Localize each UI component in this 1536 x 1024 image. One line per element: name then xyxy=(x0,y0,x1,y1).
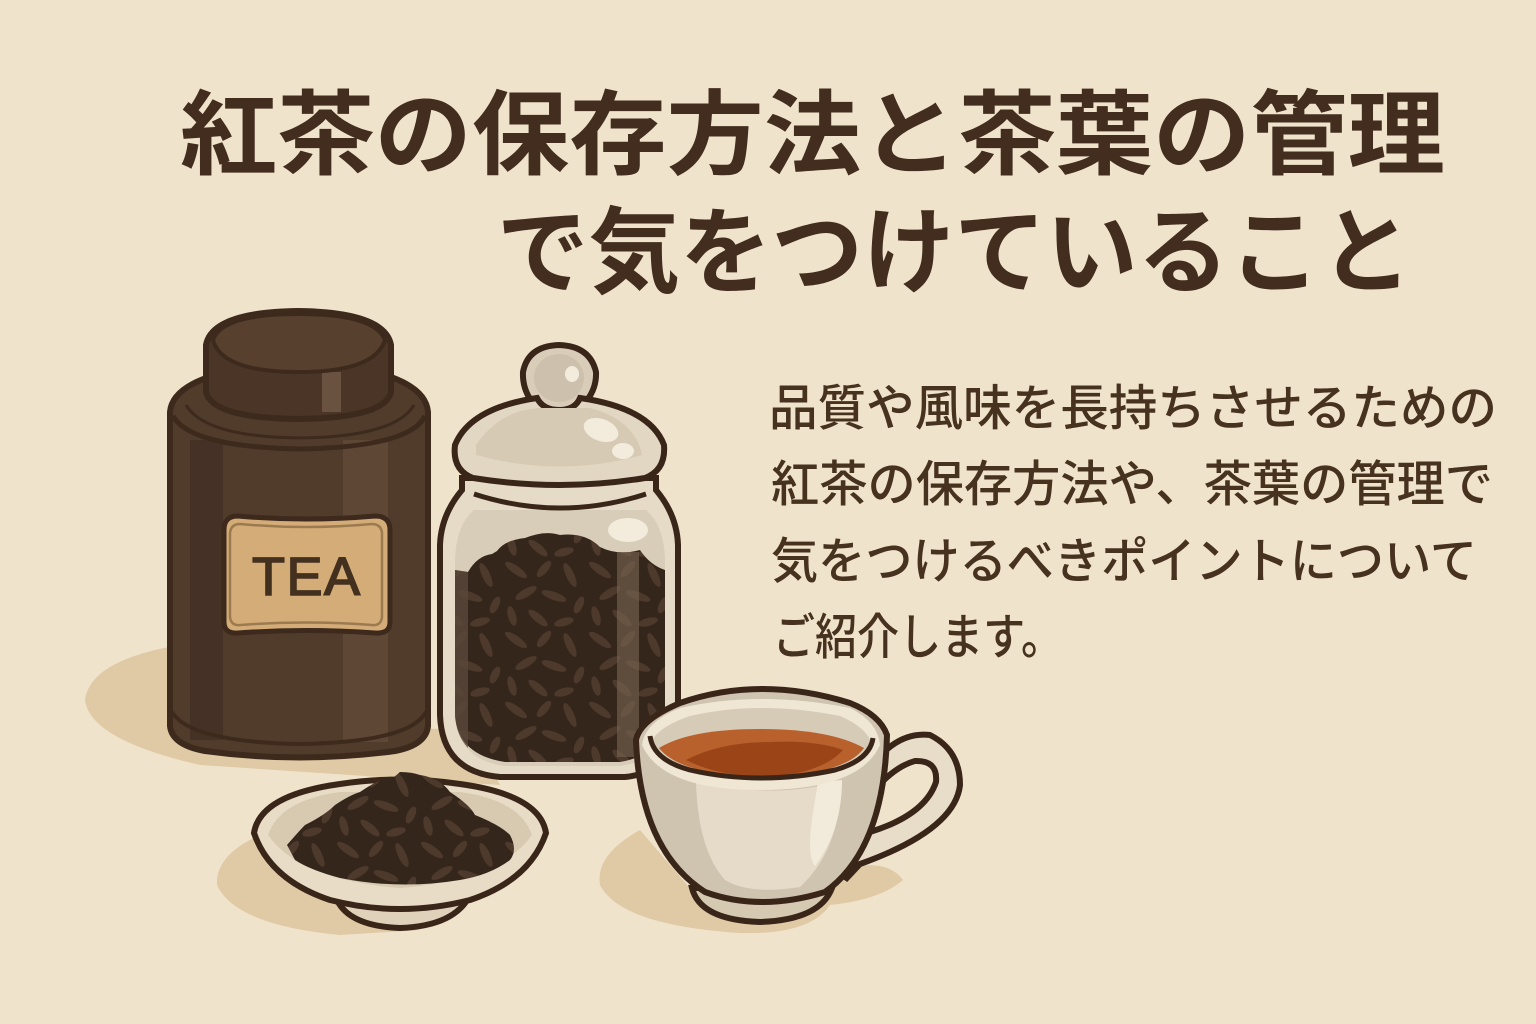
plate xyxy=(254,780,546,909)
jar inner glass xyxy=(455,510,665,766)
tin bottom rim xyxy=(172,712,426,744)
cup inner rim line xyxy=(650,736,873,778)
jar body xyxy=(440,478,678,777)
jar leaves xyxy=(455,533,665,762)
jar glass reflections xyxy=(455,570,468,748)
title xyxy=(180,85,1445,305)
icon: glass jar with leaves xyxy=(440,345,678,777)
description text xyxy=(769,382,1497,665)
jar neck line xyxy=(474,494,646,508)
leaf mound xyxy=(287,772,514,885)
description text: ご紹介します。 xyxy=(773,611,1063,665)
cup rim and interior xyxy=(642,699,880,790)
cup handle xyxy=(845,735,960,880)
cup light area xyxy=(696,780,842,890)
jar lid highlights xyxy=(580,414,622,446)
description text: 気をつけるべきポイントについて xyxy=(771,535,1477,589)
tin label xyxy=(224,516,390,633)
tin shoulder line xyxy=(173,416,425,449)
shadows on the table xyxy=(85,645,903,935)
icon: tea tin xyxy=(170,311,428,758)
jar knob xyxy=(523,345,596,408)
description text: 紅茶の保存方法や、茶葉の管理で xyxy=(771,458,1493,512)
icon: plate of tea leaves xyxy=(254,772,546,928)
tin body xyxy=(170,375,428,758)
tin side shading xyxy=(190,440,223,740)
description text: 品質や風味を長持ちさせるための xyxy=(769,382,1497,436)
title: で気をつけていること xyxy=(497,200,1412,305)
tea surface xyxy=(659,729,864,777)
cup body xyxy=(636,689,887,902)
tin lid xyxy=(206,311,391,419)
tin label text: TEA xyxy=(252,547,360,607)
plate foot xyxy=(335,895,470,928)
jar lid xyxy=(455,398,664,485)
cup foot xyxy=(692,888,832,922)
title: 紅茶の保存方法と茶葉の管理 xyxy=(180,85,1445,187)
icon: tea cup xyxy=(636,689,960,922)
